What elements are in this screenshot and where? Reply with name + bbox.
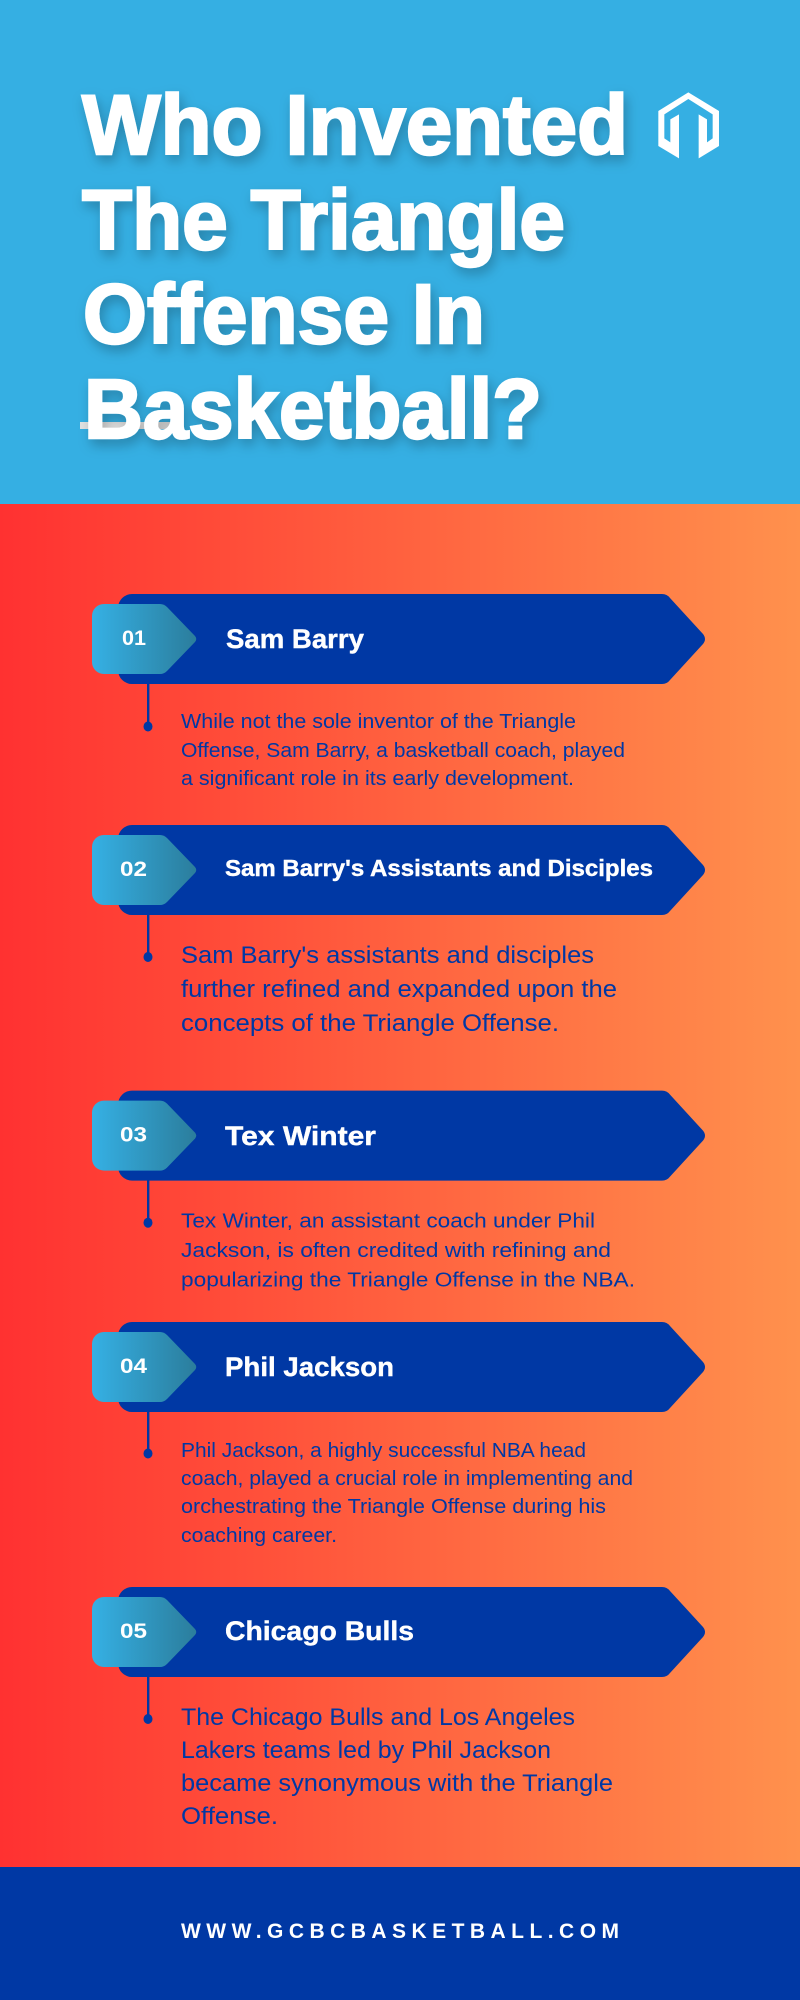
arrow banner <box>118 1091 705 1181</box>
connector line and dot <box>144 1411 152 1458</box>
body text <box>181 1210 635 1292</box>
body text: Offense. <box>181 1803 278 1830</box>
body text <box>181 942 617 1037</box>
number badge <box>92 1101 196 1171</box>
title: Who Invented <box>82 78 628 172</box>
step 05: Chicago Bulls <box>92 1587 705 1830</box>
step 03: Tex Winter <box>92 1091 705 1292</box>
number badge <box>92 835 196 905</box>
body text: orchestrating the Triangle Offense during his <box>181 1496 606 1518</box>
arrow banner <box>118 825 705 915</box>
connector line and dot <box>144 915 152 962</box>
title: Offense In <box>83 267 485 361</box>
body text: further refined and expanded upon the <box>181 976 617 1003</box>
body text <box>181 1704 613 1830</box>
body text: Jackson, is often credited with refining and <box>181 1240 611 1262</box>
website url: WWW.GCBCBASKETBALL.COM <box>181 1920 619 1943</box>
arrow banner <box>118 594 705 684</box>
body text: became synonymous with the Triangle <box>181 1770 613 1797</box>
body text: Phil Jackson, a highly successful NBA head <box>181 1440 586 1462</box>
connector line and dot <box>144 1180 152 1228</box>
arrow banner <box>118 1322 705 1412</box>
heading: Tex Winter <box>225 1121 377 1151</box>
number badge <box>92 1332 196 1402</box>
title <box>82 78 628 456</box>
heading: Chicago Bulls <box>225 1616 414 1646</box>
number: 05 <box>120 1620 147 1643</box>
step 02: Sam Barry's Assistants and Disciples <box>92 825 705 1037</box>
body text: Sam Barry's assistants and disciples <box>181 942 594 969</box>
number: 01 <box>122 627 146 650</box>
body text: Lakers teams led by Phil Jackson <box>181 1737 551 1764</box>
number: 02 <box>120 858 147 881</box>
panel: title header <box>0 0 800 504</box>
title: The Triangle <box>82 173 565 267</box>
panel: footer <box>0 1867 800 2000</box>
body text <box>181 711 625 790</box>
body text: coach, played a crucial role in implementing and <box>181 1468 633 1490</box>
title: Basketball? <box>84 362 542 456</box>
icon: hexagon logo <box>658 92 719 158</box>
body text: Tex Winter, an assistant coach under Phil <box>181 1210 595 1232</box>
connector line and dot <box>144 684 152 732</box>
body text: Offense, Sam Barry, a basketball coach, played <box>181 740 625 762</box>
connector line and dot <box>144 1676 152 1724</box>
body text: concepts of the Triangle Offense. <box>181 1010 559 1037</box>
heading: Sam Barry's Assistants and Disciples <box>225 855 653 881</box>
arrow banner <box>118 1587 705 1677</box>
number: 04 <box>120 1355 147 1378</box>
body text: While not the sole inventor of the Triangle <box>181 711 576 733</box>
heading: Sam Barry <box>226 624 364 654</box>
body text: coaching career. <box>181 1525 337 1547</box>
number badge <box>92 604 196 674</box>
step 04: Phil Jackson <box>92 1322 705 1547</box>
body text <box>181 1440 633 1547</box>
underline accent behind title <box>80 422 181 429</box>
number: 03 <box>120 1124 147 1146</box>
body text: The Chicago Bulls and Los Angeles <box>181 1704 575 1731</box>
body text: popularizing the Triangle Offense in the NBA. <box>181 1270 635 1292</box>
step 01: Sam Barry <box>92 594 705 790</box>
heading: Phil Jackson <box>225 1352 394 1382</box>
body text: a significant role in its early development. <box>181 768 574 790</box>
number badge <box>92 1597 196 1667</box>
panel: gradient background <box>0 504 800 1867</box>
